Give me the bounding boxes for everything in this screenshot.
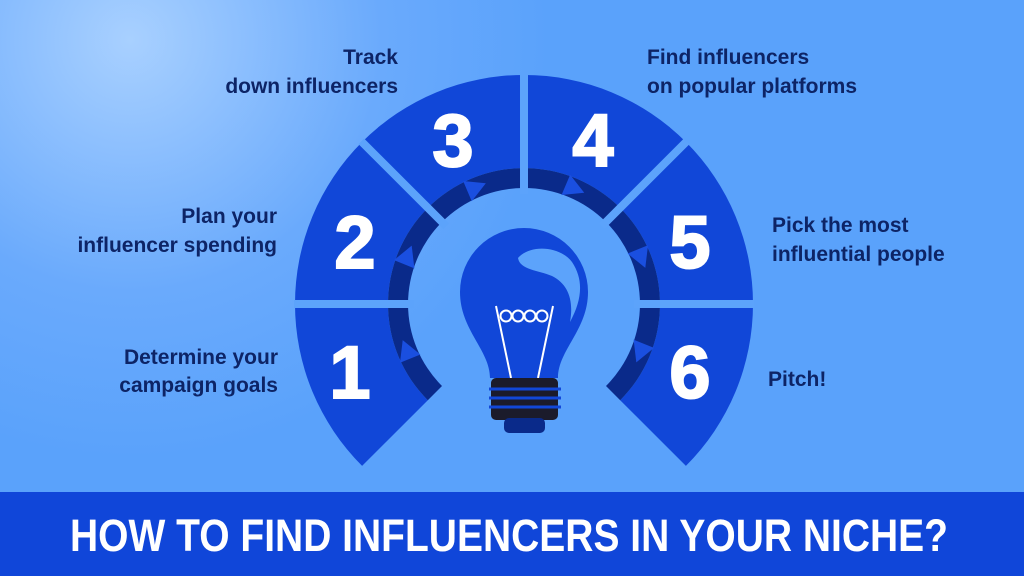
step numbers: 1 bbox=[329, 331, 371, 414]
label 3: Track bbox=[343, 46, 398, 69]
label 1: Determine your bbox=[124, 346, 278, 369]
label 2: influencer spending bbox=[77, 234, 277, 257]
icon: light bulb bbox=[460, 228, 588, 433]
label 5: Pick the most bbox=[772, 214, 909, 237]
step numbers: 6 bbox=[669, 331, 711, 414]
step numbers: 4 bbox=[572, 99, 614, 182]
title banner bbox=[0, 492, 1024, 576]
label 5: influential people bbox=[772, 243, 945, 266]
step numbers: 3 bbox=[432, 99, 474, 182]
step labels bbox=[77, 46, 945, 397]
label 3: down influencers bbox=[225, 75, 398, 98]
label 6: Pitch! bbox=[768, 368, 826, 391]
diagram: six-step arc bbox=[294, 74, 754, 466]
arrows on ring bbox=[393, 173, 655, 366]
label 1: campaign goals bbox=[119, 374, 278, 397]
step numbers: 5 bbox=[669, 201, 711, 284]
step numbers: 2 bbox=[334, 201, 376, 284]
label 4: on popular platforms bbox=[647, 75, 857, 98]
label 4: Find influencers bbox=[647, 46, 809, 69]
label 2: Plan your bbox=[181, 205, 277, 228]
step numbers bbox=[329, 99, 711, 414]
